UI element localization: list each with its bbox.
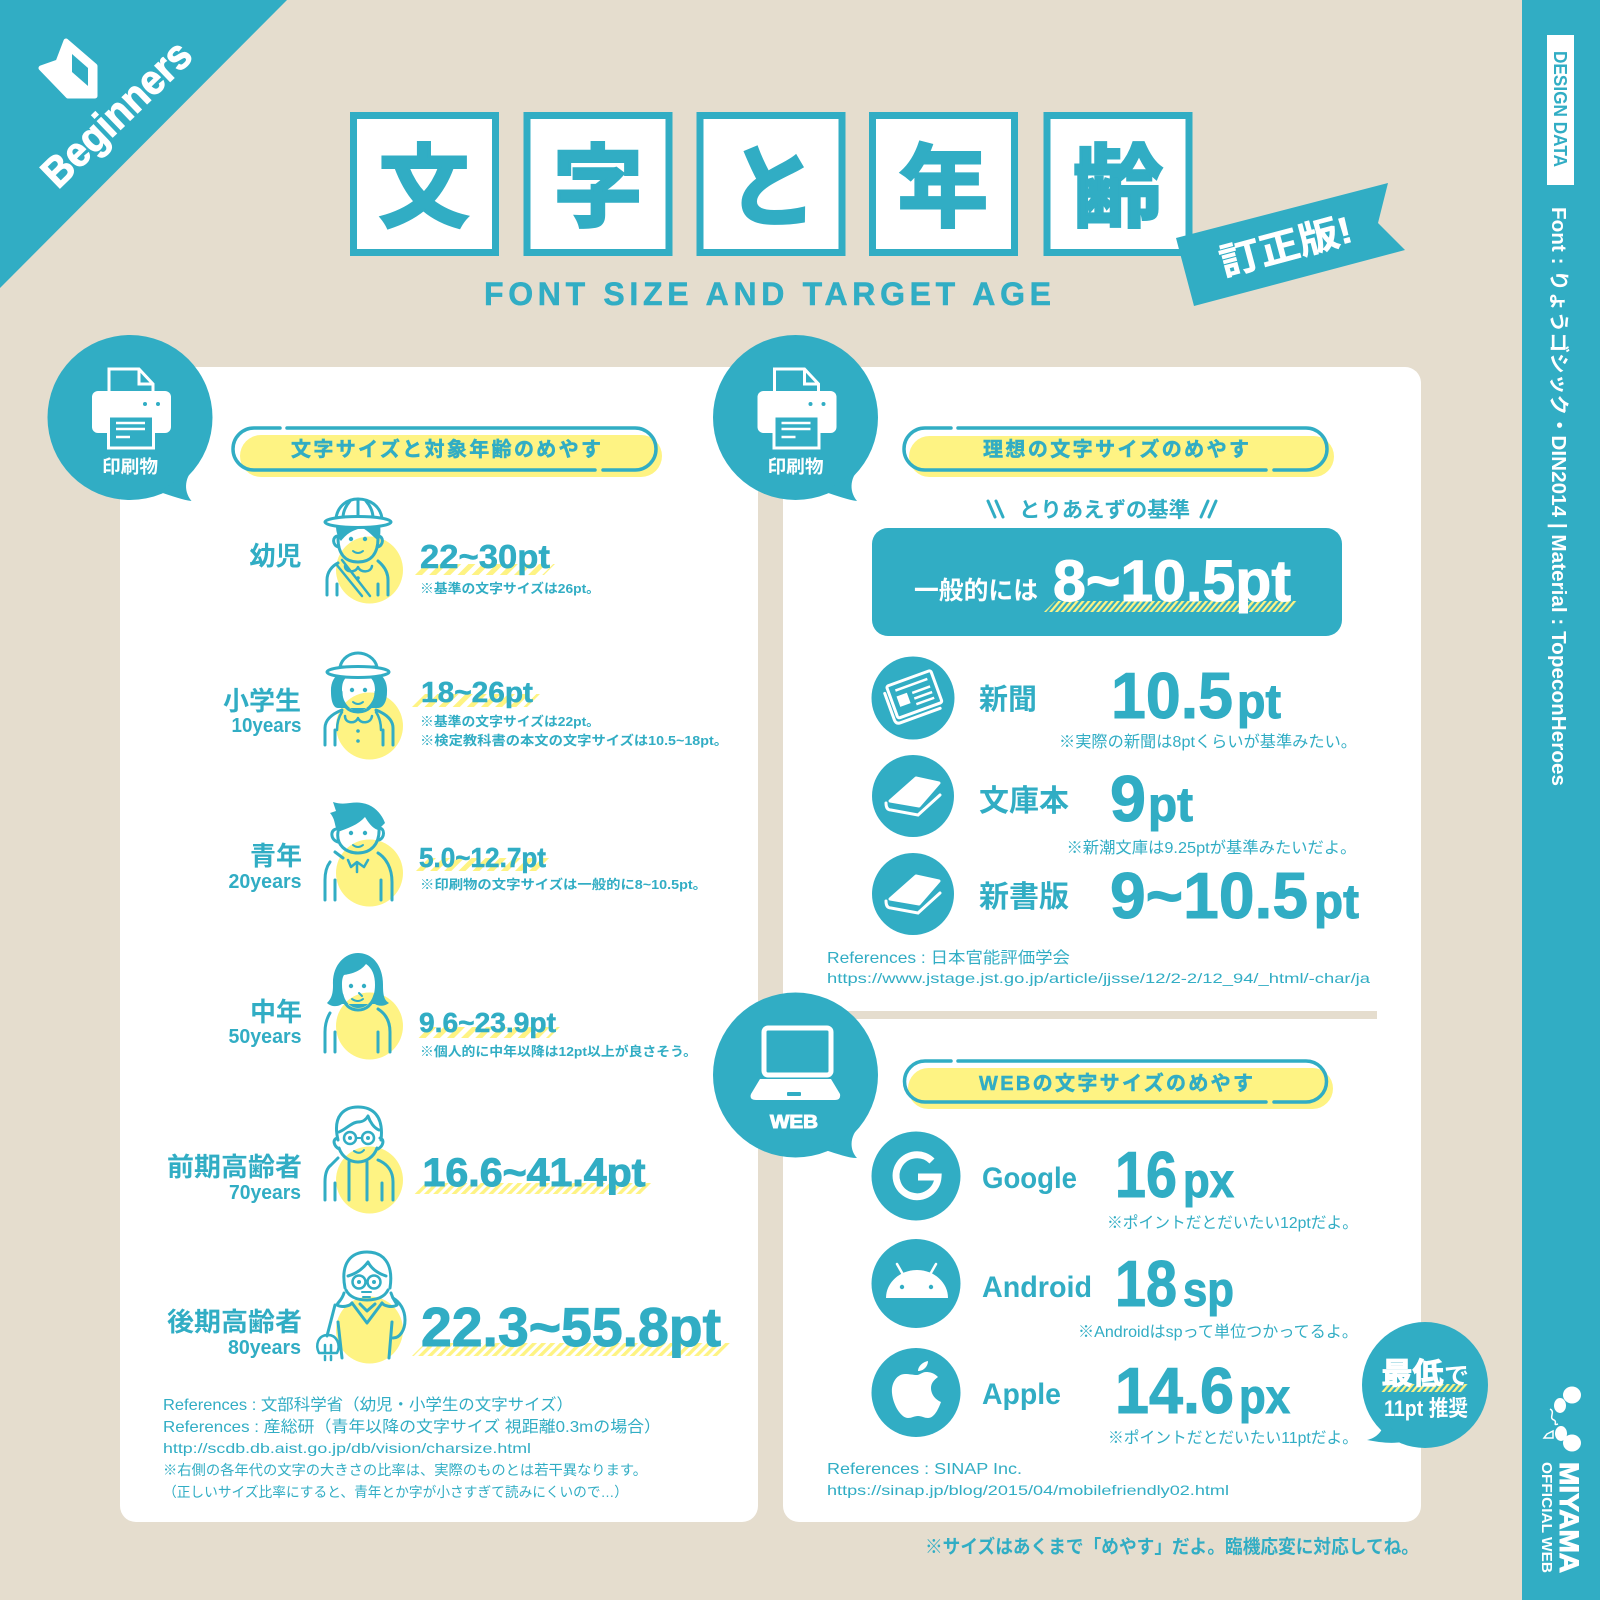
size value: pt — [1314, 876, 1359, 929]
size value: px — [1239, 1371, 1290, 1424]
size value: sp — [1183, 1264, 1234, 1317]
notes — [420, 714, 728, 748]
row: 幼児 — [250, 499, 600, 604]
row: 新聞 — [872, 656, 1357, 751]
tag: DESIGN DATA — [1547, 35, 1574, 185]
references: web: https://sinap.jp/blog/2015/04/mobilefriendly02.html — [827, 1482, 1229, 1498]
references: print: https://www.jstage.jst.go.jp/article/jjsse/12/2-2/12_94/_html/-char/ja — [827, 970, 1370, 986]
callout: general size — [872, 528, 1342, 636]
badge: print (left) — [48, 335, 212, 501]
references: left card: ※右側の各年代の文字の大きさの比率は、実際のものとは若干異なります。 — [163, 1462, 647, 1478]
icon: newspaper — [872, 656, 954, 740]
icon: middle-aged — [325, 953, 403, 1060]
label: 中年 — [250, 997, 302, 1027]
references: left card: References : 産総研（青年以降の文字サイズ 視距離0.3mの場合） — [163, 1418, 661, 1436]
size value: 16 — [1115, 1138, 1177, 1211]
notes: ※基準の文字サイズは22pt。 — [420, 714, 600, 729]
row: 後期高齢者 — [167, 1252, 730, 1364]
heading: WEBの文字サイズのめやす — [904, 1061, 1333, 1109]
age: 80years — [228, 1337, 301, 1359]
label: 幼児 — [250, 541, 302, 571]
size value — [1115, 1138, 1234, 1211]
references: web: References : SINAP Inc. — [827, 1461, 1022, 1478]
logo: MIYAMA: MIYAMA — [1554, 1462, 1584, 1573]
size value: 9 — [1110, 762, 1146, 835]
row: 小学生 — [223, 653, 728, 760]
label: 後期高齢者 — [167, 1307, 302, 1337]
tag: DESIGN DATA: DESIGN DATA — [1550, 51, 1570, 167]
badge label: 印刷物 — [768, 457, 824, 477]
size value: 9~10.5 — [1110, 859, 1308, 932]
size value: 22~30pt — [420, 538, 550, 575]
divider — [783, 1011, 1377, 1019]
row: 新書版 — [872, 853, 1359, 935]
logo: MIYAMA — [1538, 1386, 1584, 1573]
heading: 理想の文字サイズのめやす: 理想の文字サイズのめやす — [983, 437, 1249, 461]
panel: left card — [120, 367, 758, 1522]
size value: 18~26pt — [421, 677, 533, 709]
references: left card: http://scdb.db.aist.go.jp/db/vision/charsize.html — [163, 1440, 531, 1456]
subheading: とりあえずの基準: とりあえずの基準 — [1019, 499, 1190, 522]
badge: print (right) — [713, 335, 878, 501]
row: Google — [872, 1132, 1358, 1232]
subtitle: FONT SIZE AND TARGET AGE — [484, 276, 1051, 312]
credits text: Font : りょうゴシック・DIN2014 | Material : TopeconHeroes — [1547, 207, 1571, 786]
callout bubble: 最低で 11pt 推奨 — [1362, 1322, 1488, 1448]
icon: senior 70 — [325, 1107, 403, 1214]
references: left card: References : 文部科学省（幼児・小学生の文字サイズ） — [163, 1396, 573, 1414]
badge label: WEB — [770, 1112, 818, 1132]
row: 文庫本 — [872, 755, 1356, 857]
label: 小学生 — [223, 686, 301, 716]
label: 青年 — [250, 841, 302, 871]
title: 文字と年齢 — [354, 116, 1189, 252]
icon: book — [872, 853, 954, 935]
title: 文字と年齢: 字 — [553, 139, 643, 239]
right side bar — [1522, 0, 1600, 1600]
callout: general size: 一般的には — [914, 577, 1038, 605]
corner ribbon: Beginners — [0, 0, 287, 288]
label: 新聞 — [979, 683, 1037, 716]
label: Android — [982, 1271, 1092, 1304]
heading: WEBの文字サイズのめやす: WEBの文字サイズのめやす — [979, 1071, 1253, 1095]
icon: beginner mark — [41, 41, 95, 96]
label: Apple — [982, 1378, 1061, 1411]
note: ※新潮文庫は9.25ptが基準みたいだよ。 — [1066, 839, 1356, 857]
size value: 22.3~55.8pt — [421, 1296, 721, 1358]
title: 文字と年齢: と — [727, 139, 817, 239]
logo: MIYAMA: OFFICIAL WEB — [1538, 1462, 1555, 1573]
badge: WEB — [713, 992, 878, 1158]
title: 文字と年齢: 年 — [898, 139, 988, 239]
icon: book — [872, 755, 954, 837]
row: Apple — [872, 1348, 1358, 1447]
note: ※ポイントだとだいたい11ptだよ。 — [1108, 1429, 1358, 1447]
size value: 5.0~12.7pt — [419, 842, 546, 873]
references: left card: （正しいサイズ比率にすると、青年とか字が小さすぎて読みにくいので…） — [163, 1484, 628, 1500]
icon: laptop — [751, 1028, 840, 1100]
references: print: References : 日本官能評価学会 — [827, 949, 1070, 967]
panel: right card — [783, 367, 1421, 1522]
icon: schoolchild — [325, 653, 403, 760]
size value: px — [1183, 1155, 1234, 1208]
callout bubble: 最低で 11pt 推奨: 11pt 推奨 — [1384, 1396, 1468, 1421]
size value — [1110, 762, 1193, 835]
label: 文庫本 — [979, 785, 1069, 818]
ribbon: 訂正版!: 訂正版! — [1215, 209, 1356, 284]
note: ※ポイントだとだいたい12ptだよ。 — [1107, 1214, 1358, 1232]
icon: printer — [758, 369, 836, 448]
references: print — [827, 949, 1370, 986]
callout bubble: 最低で 11pt 推奨: 最低 — [1382, 1358, 1444, 1391]
age: 20years — [228, 871, 302, 893]
size value: pt — [1237, 676, 1281, 729]
note: ※印刷物の文字サイズは一般的に8~10.5pt。 — [420, 877, 707, 892]
row: 青年 — [228, 802, 707, 906]
note: ※個人的に中年以降は12pt以上が良さそう。 — [420, 1044, 697, 1059]
icon: young adult — [325, 802, 403, 906]
note: ※実際の新聞は8ptくらいが基準みたい。 — [1059, 733, 1357, 751]
ribbon text: Beginners — [32, 31, 201, 196]
heading: 文字サイズと対象年齢のめやす: 文字サイズと対象年齢のめやす — [291, 437, 601, 461]
icon: Android — [872, 1239, 960, 1328]
callout: general size: 8~10.5pt — [1053, 549, 1291, 614]
label: Google — [982, 1162, 1077, 1195]
age: 70years — [229, 1182, 301, 1204]
row: 前期高齢者 — [167, 1107, 652, 1214]
badge label: 印刷物 — [102, 457, 158, 477]
note: ※基準の文字サイズは26pt。 — [420, 581, 600, 596]
age: 50years — [228, 1026, 302, 1048]
icon: senior 80 — [317, 1252, 405, 1364]
heading: 理想の文字サイズのめやす — [904, 428, 1334, 477]
label: 新書版 — [979, 881, 1069, 914]
row: Android — [872, 1239, 1358, 1341]
title: 文字と年齢: 齢 — [1073, 139, 1163, 239]
footer note: ※サイズはあくまで「めやす」だよ。臨機応変に対応してね。 — [925, 1535, 1419, 1558]
title: 文字と年齢: 文 — [379, 139, 469, 239]
age: 10years — [232, 715, 302, 737]
size value: 14.6 — [1115, 1354, 1234, 1427]
icon: printer — [92, 369, 171, 448]
notes: ※検定教科書の本文の文字サイズは10.5~18pt。 — [420, 733, 728, 748]
icon: Google — [872, 1132, 960, 1220]
callout bubble: 最低で 11pt 推奨: で — [1444, 1363, 1469, 1390]
size value — [1115, 1247, 1234, 1320]
references: web — [827, 1461, 1229, 1498]
icon: child — [325, 499, 403, 604]
references: left card — [163, 1396, 661, 1500]
size value: 9.6~23.9pt — [419, 1007, 556, 1038]
size value: pt — [1148, 779, 1193, 832]
ribbon: 訂正版! — [1176, 183, 1405, 306]
icon: Apple — [872, 1348, 960, 1437]
note: ※Androidはspって単位つかってるよ。 — [1078, 1323, 1358, 1341]
heading: 文字サイズと対象年齢のめやす — [233, 428, 662, 477]
size value: 10.5 — [1111, 659, 1233, 732]
size value: 18 — [1115, 1247, 1177, 1320]
size value: 16.6~41.4pt — [422, 1151, 646, 1195]
row: 中年 — [228, 953, 697, 1060]
label: 前期高齢者 — [167, 1152, 302, 1182]
